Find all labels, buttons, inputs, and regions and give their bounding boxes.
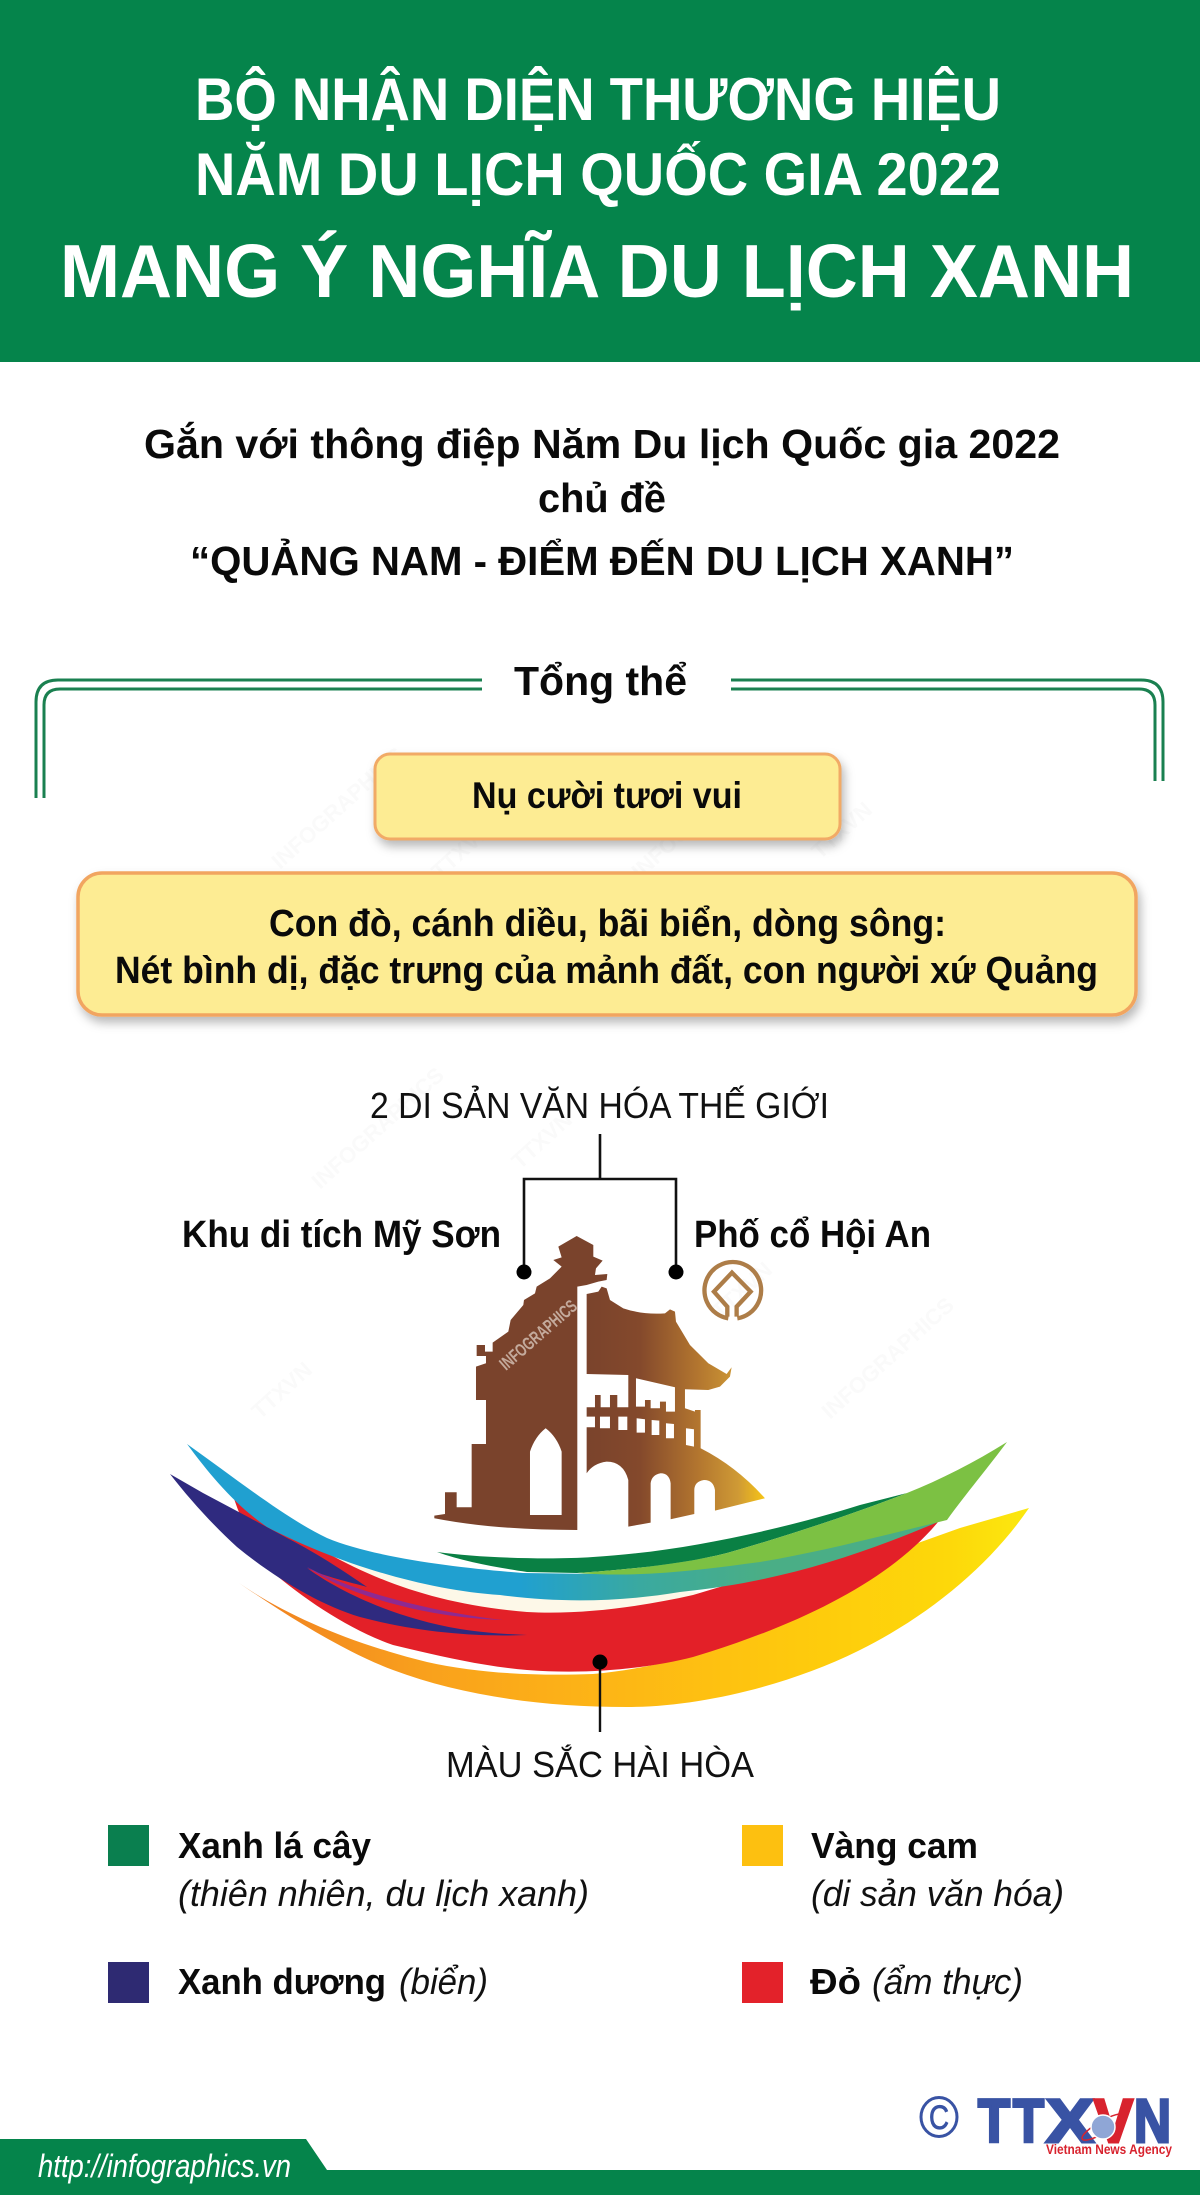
icon: UNESCO world heritage emblem bbox=[704, 1262, 761, 1318]
legend item: blue bbox=[108, 1961, 488, 2003]
copyright and TTXVN logo bbox=[921, 2087, 1172, 2157]
title line 1: BỘ NHẬN DIỆN THƯƠNG HIỆU bbox=[195, 66, 1001, 133]
ribbon: purple streak bbox=[307, 1567, 503, 1620]
legend item: green: Xanh lá cây bbox=[178, 1825, 371, 1866]
callout: Con đò, cánh diều: Nét bình dị, đặc trưng của mảnh đất, con người xứ Quảng bbox=[115, 950, 1098, 992]
background watermarks: INFOGRAPHICS bbox=[267, 742, 409, 874]
legend item: yellow: Vàng cam bbox=[811, 1825, 978, 1866]
title line 2: NĂM DU LỊCH QUỐC GIA 2022 bbox=[195, 141, 1001, 208]
legend item: green bbox=[108, 1825, 589, 1914]
background watermarks: TTXVN bbox=[707, 1257, 777, 1324]
copyright and TTXVN logo: V bbox=[1094, 2087, 1133, 2155]
background watermarks: INFOGRAPHICS bbox=[817, 1292, 959, 1424]
label: Khu di tích Mỹ Sơn: Khu di tích Mỹ Sơn bbox=[182, 1214, 501, 1256]
background watermarks: TTXVN bbox=[807, 797, 877, 864]
icon: Hoi An bridge pagoda silhouette bbox=[587, 1287, 765, 1527]
heritage label: 2 DI SẢN VĂN HÓA THẾ GIỚI bbox=[370, 1085, 829, 1126]
legend item: green: (thiên nhiên, du lịch xanh) bbox=[178, 1873, 589, 1914]
ribbon: dark green bbox=[437, 1493, 907, 1573]
callout: Con đò, cánh diều: Con đò, cánh diều, bãi biển, dòng sông: bbox=[269, 903, 946, 945]
label: Màu sắc hài hòa: MÀU SẮC HÀI HÒA bbox=[446, 1743, 754, 1785]
ribbon: sky blue bbox=[187, 1444, 938, 1600]
watermark on building: INFOGRAPHICS bbox=[496, 1296, 581, 1374]
ribbon boat logo bbox=[170, 1442, 1029, 1707]
copyright and TTXVN logo: N bbox=[1134, 2087, 1171, 2155]
section heading: Tổng thể with bracket: Tổng thể bbox=[514, 658, 687, 704]
legend item: red: Đỏ bbox=[810, 1961, 861, 2002]
ribbon: cream gap bbox=[320, 1552, 700, 1640]
title line 3: MANG Ý NGHĨA DU LỊCH XANH bbox=[60, 229, 1134, 313]
label: Phố cổ Hội An: Phố cổ Hội An bbox=[694, 1214, 931, 1256]
ribbon: red bbox=[232, 1492, 938, 1672]
background watermarks bbox=[247, 742, 959, 1424]
subtitle message: “QUẢNG NAM - ĐIỂM ĐẾN DU LỊCH XANH” bbox=[190, 537, 1014, 584]
marker line: colours bbox=[592, 1654, 608, 1732]
ribbon: yellow orange bbox=[239, 1508, 1029, 1707]
callout: Nụ cười tươi vui bbox=[375, 754, 840, 839]
legend item: blue: (biển) bbox=[399, 1961, 488, 2002]
copyright and TTXVN logo: T bbox=[978, 2087, 1010, 2155]
background watermarks: TTXVN bbox=[507, 1107, 577, 1174]
ribbon: dark blue bbox=[170, 1474, 527, 1635]
icon: My Son tower silhouette bbox=[434, 1236, 607, 1530]
legend item: red: (ẩm thực) bbox=[872, 1961, 1023, 2002]
background watermarks: TTXVN bbox=[427, 817, 497, 884]
ribbon: light green bbox=[577, 1442, 1007, 1575]
background watermarks: INFOGRAPHICS bbox=[307, 1062, 449, 1194]
legend item: blue: Xanh dương bbox=[178, 1961, 386, 2002]
subtitle message: Gắn với thông điệp Năm Du lịch Quốc gia 2022 bbox=[144, 421, 1060, 467]
copyright and TTXVN logo: X bbox=[1046, 2087, 1094, 2155]
callout: Con đò, cánh diều bbox=[78, 873, 1136, 1015]
footer band with URL bbox=[0, 2139, 1200, 2195]
section heading: Tổng thể with bracket bbox=[36, 658, 1163, 798]
legend item: red bbox=[742, 1961, 1023, 2003]
header banner bbox=[0, 0, 1200, 362]
copyright and TTXVN logo: Vietnam News Agency bbox=[1046, 2141, 1172, 2157]
copyright and TTXVN logo: T bbox=[1013, 2087, 1044, 2155]
subtitle message bbox=[144, 421, 1060, 584]
legend bbox=[108, 1825, 1064, 2003]
callout: Nụ cười tươi vui: Nụ cười tươi vui bbox=[472, 775, 742, 816]
legend item: yellow bbox=[742, 1825, 1064, 1914]
footer band with URL: http://infographics.vn bbox=[38, 2148, 291, 2184]
background watermarks: INFOGRAPHICS bbox=[627, 752, 769, 884]
connector: heritage tree bbox=[516, 1134, 684, 1280]
copyright and TTXVN logo: C bbox=[929, 2099, 949, 2137]
legend item: yellow: (di sản văn hóa) bbox=[811, 1873, 1064, 1914]
background watermarks: TTXVN bbox=[247, 1357, 317, 1424]
subtitle message: chủ đề bbox=[538, 475, 666, 521]
